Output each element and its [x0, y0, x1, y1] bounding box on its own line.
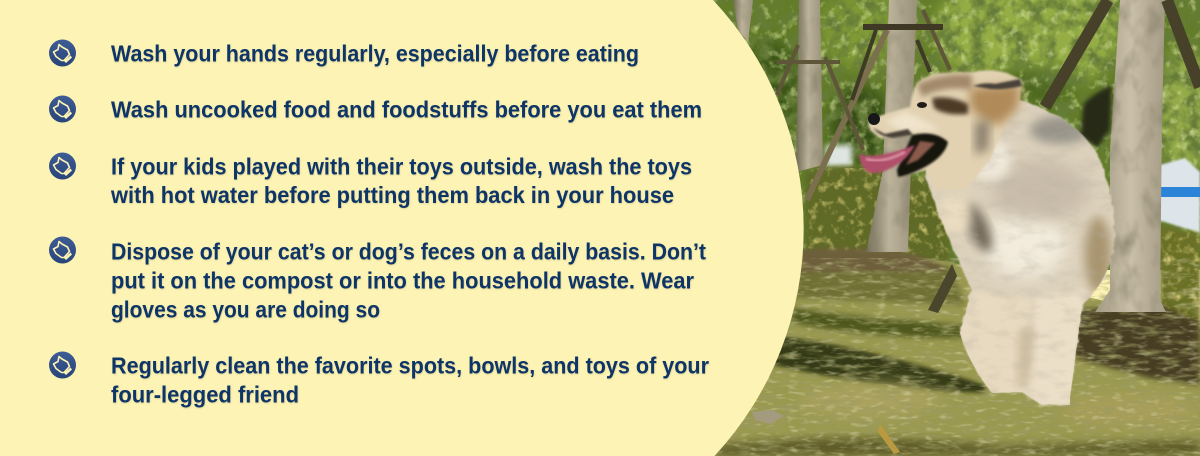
text: food washing: Wash uncooked food and foodstuffs before you eat them [111, 96, 702, 122]
icon: pet paw bullet [49, 96, 76, 122]
panel: yellow semicircle [0, 0, 804, 456]
icon: pet paw bullet [49, 152, 76, 180]
text: toys: If your kids played with their toys outside, wash the toys [111, 154, 692, 180]
tip 3: with hot water before putting them back in your house [110, 182, 674, 208]
tip 1 [49, 40, 639, 66]
text: feces disposal: Dispose of your cat’s or dog’s feces on a daily basis. Don’t [111, 238, 706, 264]
icon: pet paw bullet [49, 236, 76, 264]
tip 4 [49, 236, 706, 322]
tip 4: put it on the compost or into the household waste. Wear [111, 268, 694, 294]
icon: pet paw bullet [49, 40, 76, 66]
text: cleaning spots: Regularly clean the favorite spots, bowls, and toys of your [111, 352, 709, 378]
foliage background [700, 0, 1200, 270]
text: hand washing: Wash your hands regularly, especially before eating [111, 40, 639, 66]
ground [700, 248, 1200, 456]
tip 5 [49, 352, 709, 408]
dog [859, 70, 1120, 410]
dog body [925, 100, 1115, 405]
tip 3 [49, 152, 692, 208]
tree trunks and stakes [733, 0, 1200, 313]
dog head [859, 70, 1022, 190]
bushes [805, 166, 1200, 325]
icon: pet paw bullet [49, 352, 76, 378]
photo: dog walking in a park [700, 0, 1200, 456]
tip 2 [49, 96, 702, 122]
dog mouth and tongue [859, 134, 948, 177]
tip 5: four-legged friend [111, 382, 299, 408]
white and blue sign [826, 145, 1200, 233]
tip 4: gloves as you are doing so [111, 296, 380, 322]
